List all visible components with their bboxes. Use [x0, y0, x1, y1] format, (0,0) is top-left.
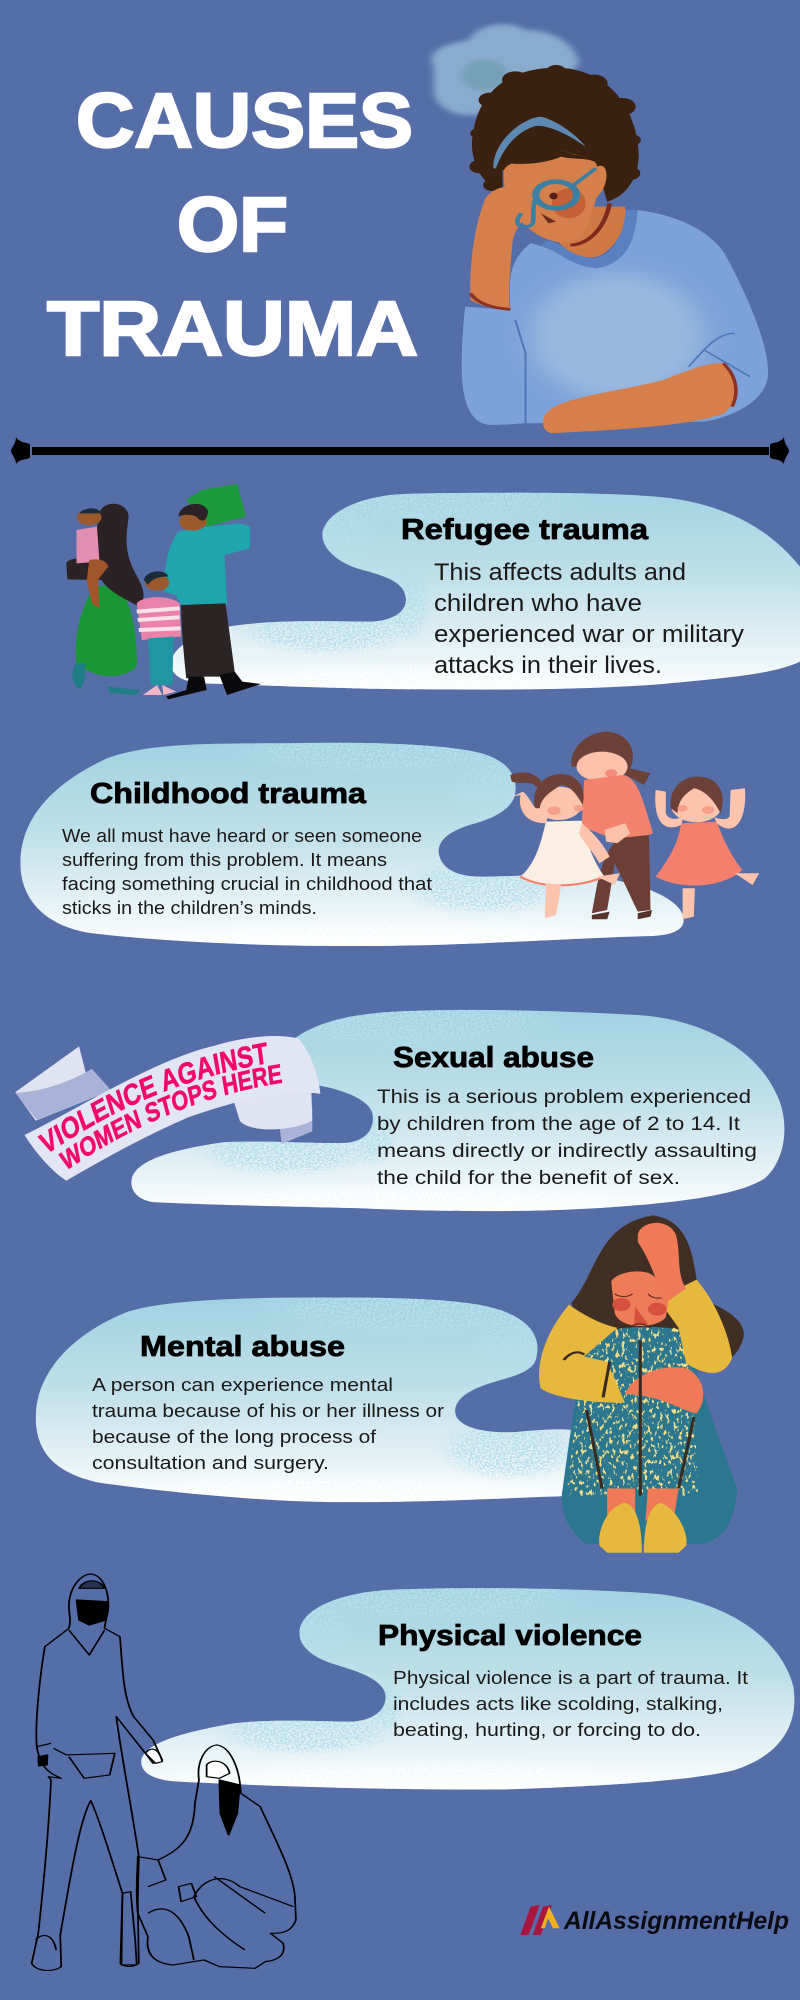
body text: childhood trauma: We all must have heard or seen someone [62, 825, 422, 846]
title: TRAUMA [47, 286, 418, 372]
body text: sexual abuse: by children from the age of 2 to 14. It [377, 1113, 741, 1135]
logo wordmark: AllAssignmentHelp [563, 1907, 789, 1935]
body text: sexual abuse [377, 1086, 757, 1189]
illustration: ribbon banner: WOMEN STOPS HERE [58, 1064, 282, 1170]
illustration: ribbon banner: VIOLENCE AGAINST [37, 1042, 267, 1152]
title: CAUSES [76, 78, 413, 164]
panel: physical violence [32, 1563, 800, 1970]
body text: mental abuse: trauma because of his or her illness or [92, 1400, 444, 1421]
heading: refugee trauma: Refugee trauma [401, 514, 649, 546]
illustration: two masked figures outline [32, 1574, 296, 1970]
speech bubble: physical violence [141, 1588, 794, 1790]
body text: sexual abuse: the child for the benefit of sex. [377, 1167, 680, 1189]
panel: mental abuse [26, 1215, 744, 1553]
body text: physical violence: includes acts like scolding, stalking, [393, 1693, 723, 1714]
body text: childhood trauma: sticks in the children’s minds. [62, 897, 317, 918]
speech bubble: childhood [20, 742, 684, 946]
body text: childhood trauma [62, 825, 432, 918]
heading: sexual abuse: Sexual abuse [393, 1042, 594, 1074]
illustration: sitting crying girl [539, 1215, 744, 1553]
body text: mental abuse: A person can experience mental [92, 1374, 393, 1395]
body text: sexual abuse: This is a serious problem experienced [377, 1086, 751, 1108]
panel: sexual abuse [15, 1010, 784, 1212]
body text: mental abuse: because of the long process of [92, 1426, 377, 1447]
panel: refugee trauma [66, 484, 800, 700]
heading: physical violence: Physical violence [378, 1620, 642, 1652]
illustration: ribbon banner [15, 1036, 320, 1181]
body text: refugee trauma: This affects adults and [434, 559, 686, 586]
speech bubble: refugee [172, 492, 800, 690]
title: OF [177, 182, 288, 268]
illustration: distressed woman with cloud [431, 24, 768, 433]
body text: childhood trauma: suffering from this problem. It means [62, 849, 387, 870]
body text: refugee trauma: children who have [434, 590, 642, 617]
body text: physical violence [393, 1667, 748, 1740]
illustration: refugee family [66, 484, 261, 699]
speech bubble: mental abuse [36, 1298, 571, 1502]
divider bar [11, 437, 789, 464]
title [47, 78, 418, 372]
body text: mental abuse: consultation and surgery. [92, 1452, 329, 1473]
illustration: mother and two girls [510, 732, 759, 919]
speech bubble: sexual abuse [131, 1010, 784, 1212]
body text: physical violence: beating, hurting, or forcing to do. [393, 1719, 701, 1740]
logo: AllAssignmentHelp [520, 1905, 789, 1935]
icon: logo mark [520, 1905, 560, 1935]
body text: refugee trauma [434, 559, 744, 679]
body text: refugee trauma: experienced war or military [434, 621, 744, 648]
body text: sexual abuse: means directly or indirectly assaulting [377, 1140, 757, 1162]
heading: mental abuse: Mental abuse [140, 1331, 345, 1363]
body text: childhood trauma: facing something crucial in childhood that [62, 873, 432, 894]
body text: mental abuse [92, 1374, 444, 1473]
heading: childhood trauma: Childhood trauma [90, 778, 367, 810]
body text: refugee trauma: attacks in their lives. [434, 652, 662, 679]
panel: childhood trauma [20, 732, 760, 946]
body text: physical violence: Physical violence is a part of trauma. It [393, 1667, 748, 1688]
